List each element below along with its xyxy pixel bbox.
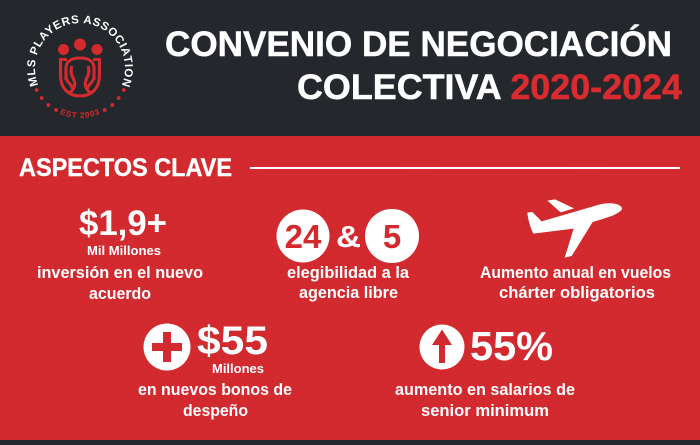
logo ring text: MLS PLAYERS ASSOCIATION	[27, 15, 133, 88]
title	[165, 24, 683, 107]
stat: 55 percent: senior minimum	[421, 402, 549, 420]
logo: MLS Players Association	[27, 15, 133, 118]
circle 5	[365, 209, 419, 263]
circle 24: 24	[285, 218, 322, 255]
unit: Millones	[212, 361, 264, 376]
icon: plus circle	[144, 324, 190, 370]
stat: 55 millones: despeño	[183, 402, 248, 420]
ampersand: &	[336, 219, 361, 254]
circle 24	[276, 210, 330, 262]
description: inversión en el nuevo	[37, 264, 203, 282]
description: Aumento anual en vuelos	[480, 264, 671, 282]
stat: 1,9 mil millones	[37, 204, 203, 303]
logo interlaced mark	[59, 58, 101, 96]
title line 2: COLECTIVA 2020-2024	[297, 68, 683, 107]
stat: 24 and 5	[276, 209, 419, 302]
logo est text: EST 2003	[60, 108, 100, 118]
number: 55%	[470, 323, 553, 369]
icon: up arrow circle	[420, 324, 464, 370]
stat: plane	[480, 199, 671, 302]
title line 1: CONVENIO DE NEGOCIACIÓN	[165, 24, 672, 64]
number: $1,9+	[79, 204, 167, 243]
stat: plane: chárter obligatorios	[499, 284, 655, 302]
icon: plane	[527, 199, 622, 258]
stat: 24 and 5: agencia libre	[299, 284, 398, 302]
unit: Mil Millones	[87, 243, 161, 258]
description: elegibilidad a la	[287, 264, 410, 282]
circle 5: 5	[383, 218, 401, 255]
heading: aspectos clave: ASPECTOS CLAVE	[19, 154, 232, 182]
number: $55	[197, 319, 268, 363]
stat: 1,9 mil millones: acuerdo	[89, 285, 151, 303]
logo heads	[58, 38, 102, 55]
description: en nuevos bonos de	[138, 381, 292, 399]
logo dots	[35, 88, 126, 112]
description: aumento en salarios de	[395, 381, 575, 399]
stat: 55 percent	[395, 323, 575, 420]
stat: 55 millones	[138, 319, 292, 420]
